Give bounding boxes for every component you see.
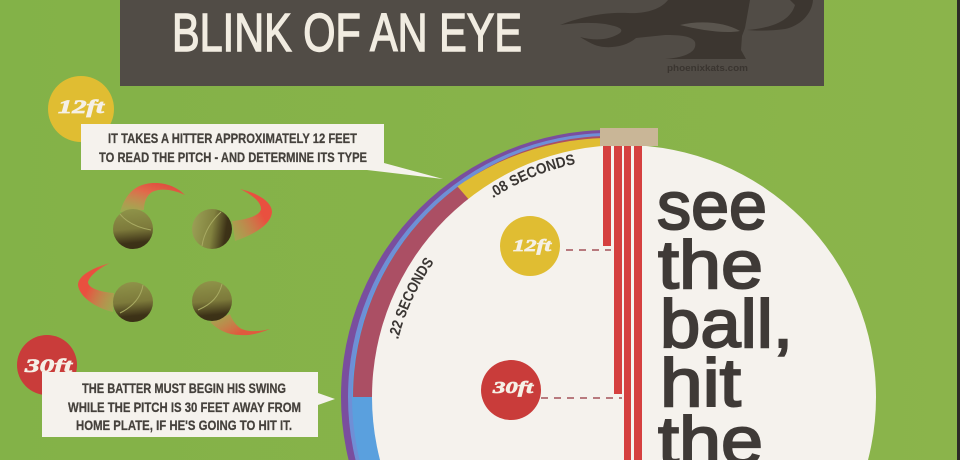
headline: ball, [660,286,793,362]
callout: 30 feet: HOME PLATE, IF HE'S GOING TO HIT IT. [76,417,292,433]
inner badge: 30ft: 30ft [492,378,535,397]
pitch type balls [78,183,272,335]
callout: 30 feet: 30ft [23,356,73,377]
dashed connectors [541,250,622,398]
title text: BLINK OF AN EYE [172,3,522,63]
white main circle [372,145,876,460]
callout: 12 feet: TO READ THE PITCH - AND DETERMINE ITS TYPE [99,149,367,165]
callout: 30 feet [17,335,335,437]
headline: the [658,227,763,303]
callout: 12 feet: 12ft [58,97,105,118]
headline: hit [660,345,741,421]
red distance bars [603,146,642,460]
label: .08 seconds: .08 SECONDS [492,154,575,198]
ball: top right [192,189,272,249]
callout: 12 feet: IT TAKES A HITTER APPROXIMATELY 12 FEET [108,130,357,146]
timeline rings [341,130,601,460]
ball: top left [113,183,185,249]
headline: see [657,168,767,244]
label: .22 seconds: .22 SECONDS [390,258,433,339]
inner badge: 30ft [481,360,541,420]
title banner [120,0,824,86]
inner badge: 12ft [500,216,560,276]
callout: 12 feet [48,76,443,179]
callout: 30 feet: WHILE THE PITCH IS 30 FEET AWAY FROM [68,399,301,415]
ball: bottom left [78,263,153,322]
ball: bottom right [192,281,270,335]
callout: 30 feet: THE BATTER MUST BEGIN HIS SWING [82,380,286,396]
flame logo [560,0,813,59]
inner badge: 12ft: 12ft [513,236,553,255]
headline [658,192,788,460]
tan home plate cap [600,128,658,146]
logo credit: phoenixkats.com [667,63,748,73]
